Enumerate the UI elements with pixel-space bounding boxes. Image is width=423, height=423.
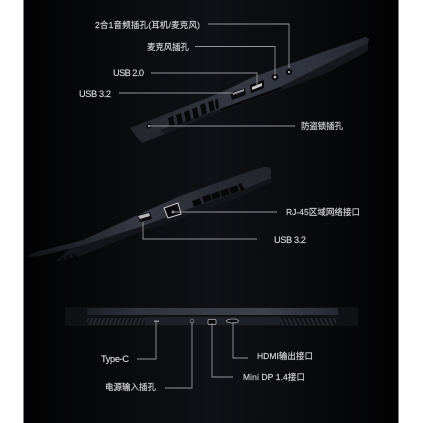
middle laptop side face [28, 167, 271, 257]
port: USB 2.0 [250, 80, 264, 93]
middle laptop underside [55, 176, 272, 262]
laptop side view: middle [28, 167, 272, 263]
callout: USB 2.0: USB 2.0 [113, 68, 144, 78]
callout: Mini DP [212, 323, 305, 382]
callout: USB 3.2 top: USB 3.2 [79, 89, 111, 99]
callout: RJ-45: RJ-45区域网络接口 [286, 207, 360, 217]
rear body top strip [87, 308, 338, 315]
callout: USB 3.2 middle: USB 3.2 [274, 235, 306, 245]
vents: top laptop [168, 99, 219, 128]
port: power input [190, 319, 194, 323]
rear body shoulders [65, 307, 358, 326]
callout: 2合1音频插孔 [95, 20, 289, 68]
vents: middle laptop left underside [60, 253, 77, 263]
callout: HDMI [233, 322, 313, 361]
port: Mini DP [208, 320, 216, 324]
port: RJ-45 [164, 203, 181, 218]
callout: 2合1音频插孔: 2合1音频插孔(耳机/麦克风) [95, 20, 200, 30]
callout: Type-C [101, 322, 156, 364]
port: USB 3.2 [230, 88, 246, 100]
rear vents left [87, 318, 145, 325]
laptop rear view: bottom [65, 307, 358, 326]
callout: 防盗锁插孔: 防盗锁插孔 [301, 121, 343, 131]
callout: 麦克风插孔 [147, 42, 275, 75]
callout: USB 3.2 middle [143, 222, 306, 245]
callout: 电源输入插孔: 电源输入插孔 [105, 382, 156, 392]
laptop dark slit [220, 86, 282, 111]
port: Type-C [154, 320, 159, 322]
callout: Type-C: Type-C [101, 354, 129, 364]
laptop underside vents [135, 129, 165, 143]
vents: middle laptop [192, 183, 245, 207]
callout: HDMI: HDMI输出接口 [257, 351, 313, 361]
rear lower body [145, 317, 280, 325]
callout: Mini DP: Mini DP 1.4接口 [243, 372, 305, 382]
port: microphone jack [272, 74, 278, 80]
laptop body side face [130, 37, 369, 137]
laptop side view: top [130, 37, 369, 143]
port: audio combo jack [286, 69, 292, 75]
rear vents right [280, 318, 336, 326]
port: HDMI [226, 319, 238, 323]
callout: 电源输入插孔 [105, 322, 192, 392]
callout: USB 2.0 [113, 68, 257, 85]
callout: 麦克风插孔: 麦克风插孔 [147, 42, 189, 52]
port: security lock [146, 124, 152, 128]
port: USB 3.2 [137, 212, 152, 222]
laptop body underside [135, 43, 368, 143]
